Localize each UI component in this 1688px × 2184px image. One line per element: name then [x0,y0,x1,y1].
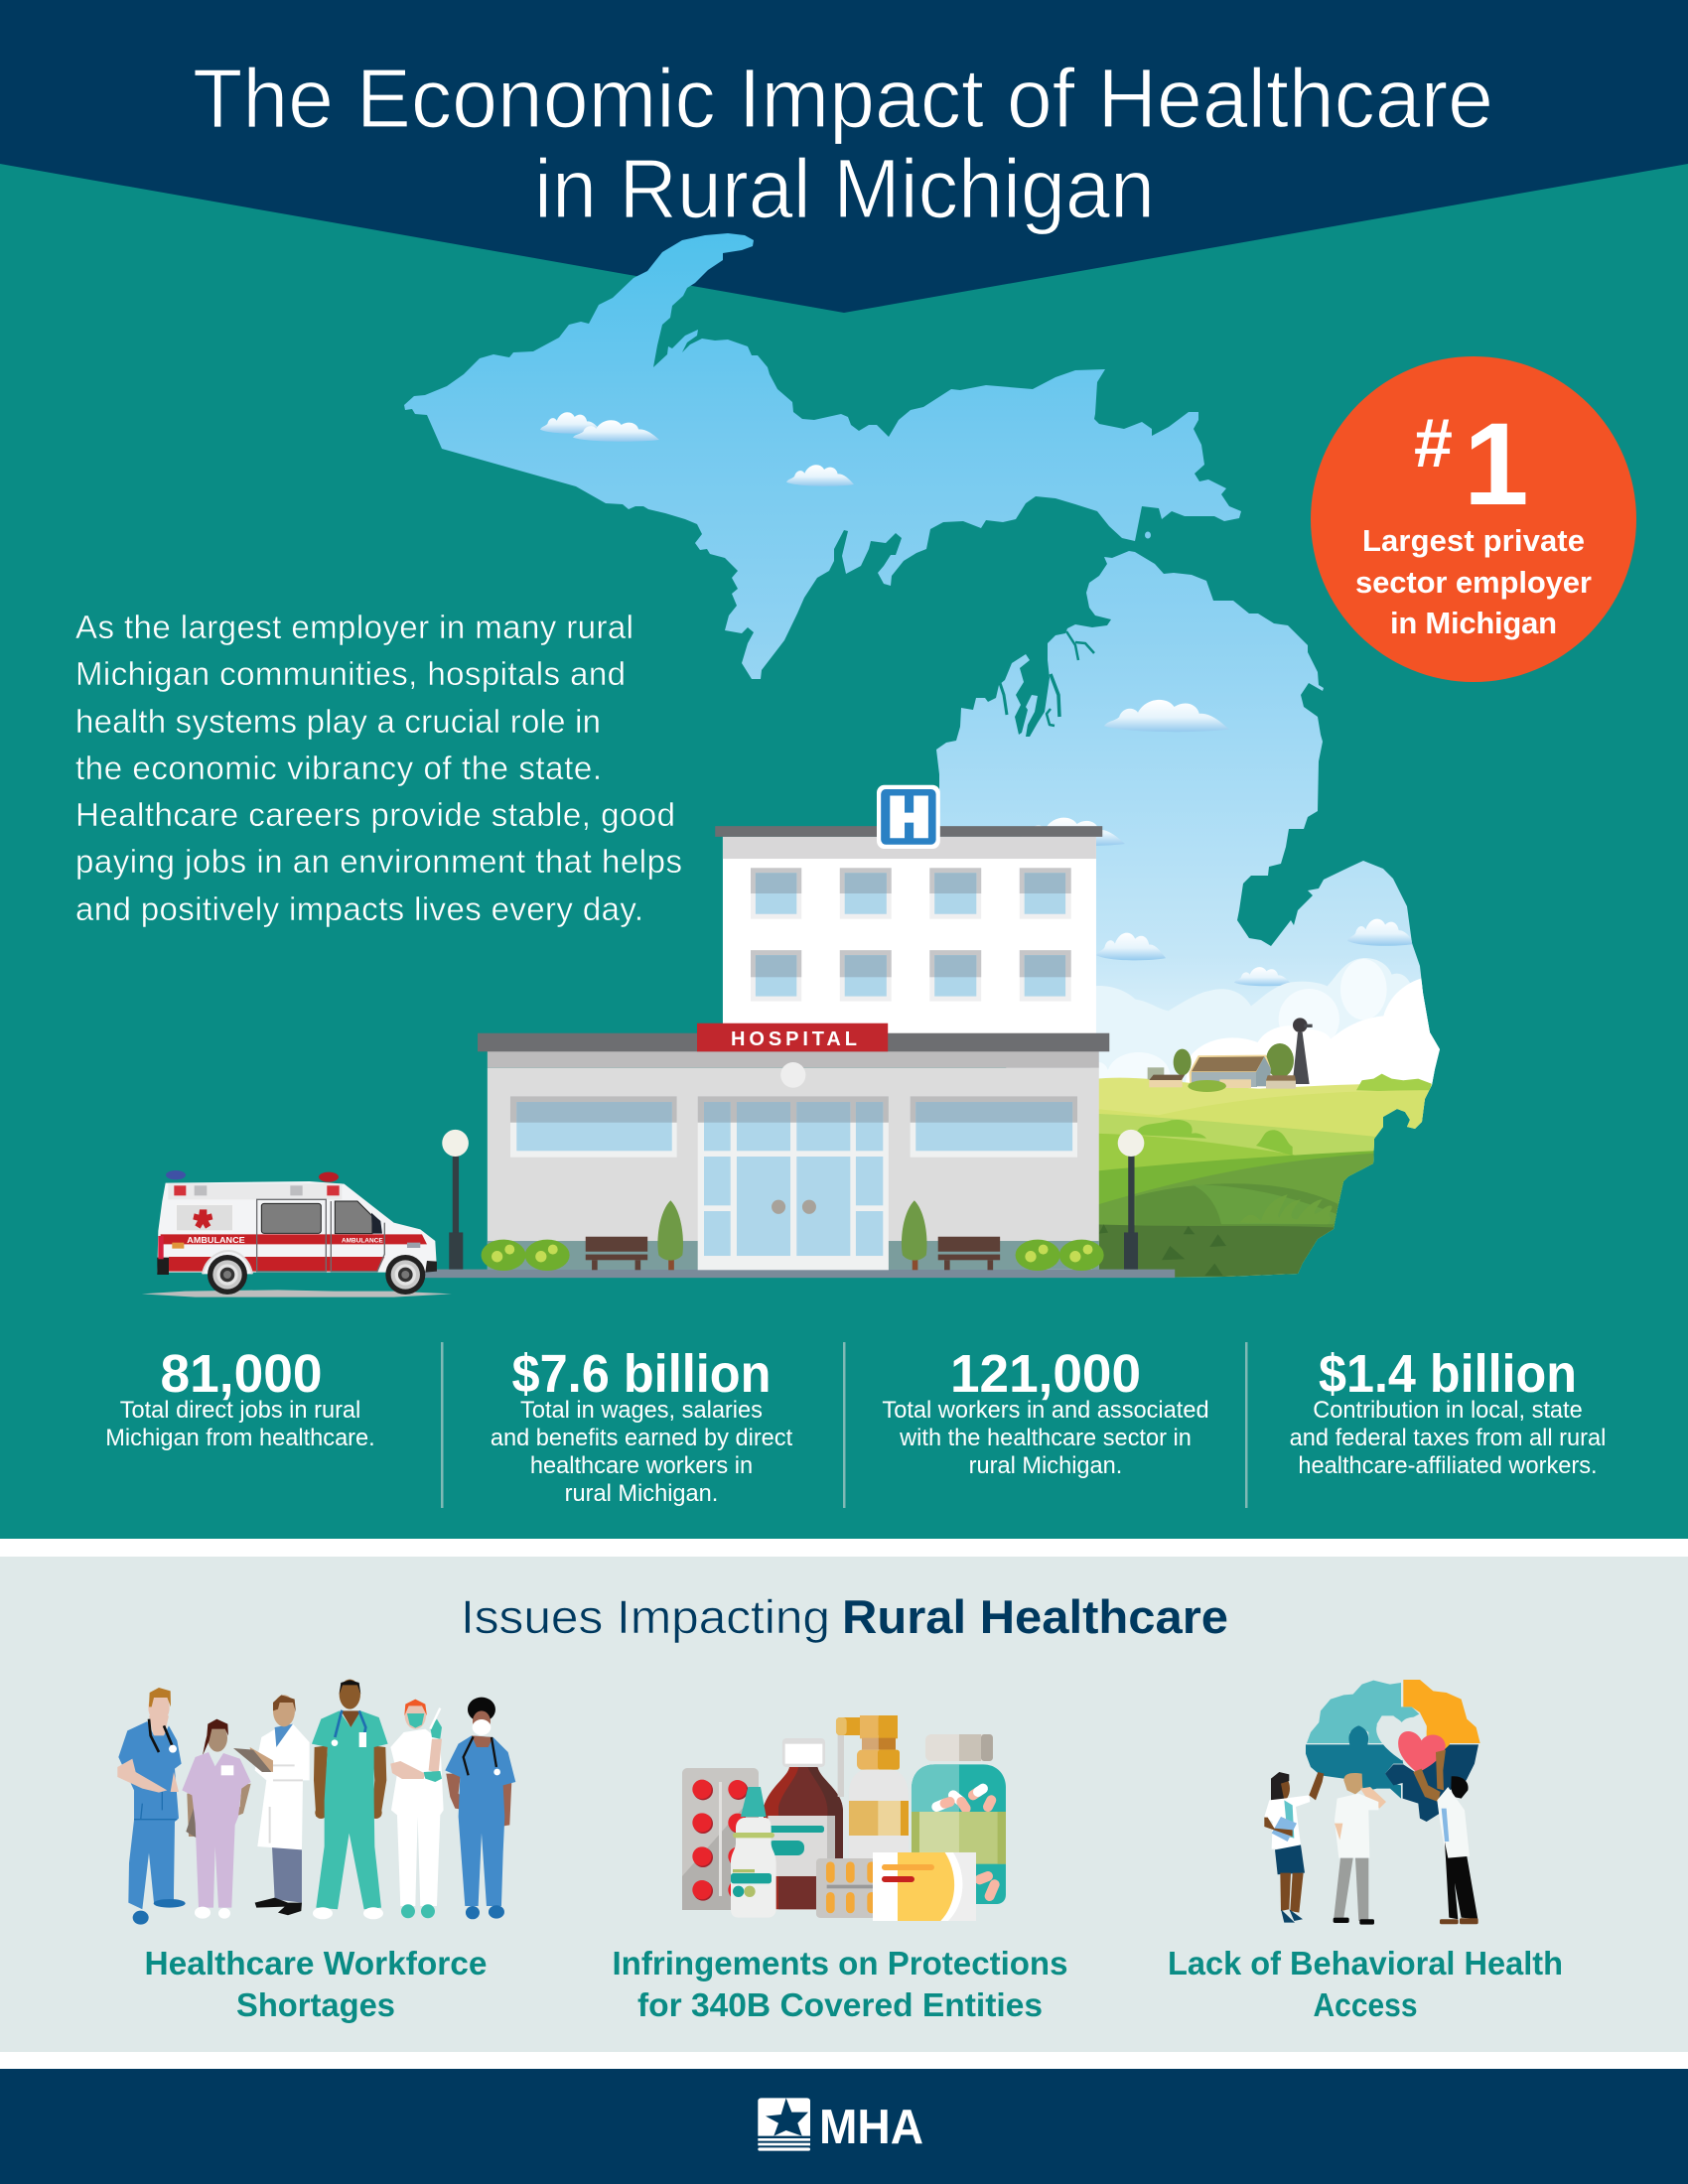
stat: total workers: with the healthcare sector in [899,1426,1192,1451]
orange spray bottle [836,1715,909,1859]
hospital upper building [715,826,1102,1035]
issue label: behavioral health: Lack of Behavioral Health [1168,1945,1563,1981]
stat: taxes: and federal taxes from all rural [1290,1426,1606,1451]
benches [586,1237,1000,1270]
barn [1190,1055,1271,1086]
stat: taxes [1290,1344,1606,1479]
callout: number one employer: sector employer [1355,565,1592,600]
small island [1145,532,1151,538]
header banner [0,0,1688,313]
icon: ambulance [142,1170,452,1297]
sky clouds [1016,700,1415,986]
distant bushes [1356,1074,1432,1093]
worker 3 [233,1695,310,1915]
lower peninsula sky [923,536,1460,1291]
entrance doors [698,1096,889,1270]
intro paragraph: paying jobs in an environment that helps [75,843,682,880]
white heart [1376,1716,1427,1760]
stat: direct jobs [105,1344,375,1451]
stat: wages: rural Michigan. [565,1481,718,1507]
tree left [1174,1049,1192,1075]
doctor centre [1334,1773,1386,1925]
stat: wages: and benefits earned by direct [491,1426,793,1451]
intro paragraph: and positively impacts lives every day. [75,890,643,927]
stat: wages [491,1344,793,1507]
red stripes [161,1234,427,1244]
mid clouds [1099,959,1386,1078]
tree right [1266,1043,1294,1078]
page background: teal panel [0,0,1688,1539]
bushes [482,1240,1104,1271]
callout: number one employer: Largest private [1362,523,1585,558]
brain puzzle bottom right [1385,1744,1478,1822]
stat: total workers [882,1344,1209,1479]
Michigan map [404,233,1460,1291]
brain puzzle top right [1403,1680,1480,1761]
title: The Economic Impact of Healthcare [193,52,1493,145]
hospital sign background [697,1024,888,1051]
intro paragraph [75,609,682,927]
capsule blister [816,1858,889,1918]
worker 1 [117,1688,186,1925]
doctor left [1264,1772,1324,1923]
stat: direct jobs: 81,000 [161,1344,322,1404]
farm outbuildings [1149,1079,1183,1087]
issue label: workforce: Shortages [236,1986,395,2023]
medicine box [873,1852,976,1921]
issue label: 340B: for 340B Covered Entities [637,1986,1043,2023]
intro paragraph: As the largest employer in many rural [75,609,633,645]
stat: taxes: Contribution in local, state [1313,1398,1583,1424]
issue label: behavioral health [1168,1945,1563,2023]
stat: taxes: $1.4 billion [1319,1344,1577,1404]
icon: hospital H sign [877,785,940,849]
stat: wages: $7.6 billion [512,1344,771,1404]
callout: number one employer [1311,356,1636,682]
inland lake channels [1000,631,1094,726]
body [157,1181,437,1273]
footer band [0,2069,1688,2184]
ground strip [419,1270,1175,1278]
panel: issues [0,1557,1688,2052]
silos [1148,1067,1164,1079]
countryside scene [1089,958,1443,1288]
brain puzzle bottom left [1306,1725,1403,1799]
pill jar [912,1734,1006,1904]
door lines [257,1199,384,1272]
side windows [510,1096,1077,1158]
intro paragraph: Michigan communities, hospitals and [75,655,626,692]
issues heading: Issues Impacting [461,1590,830,1643]
stat: direct jobs: Total direct jobs in rural [120,1398,360,1424]
red heart [1398,1731,1446,1773]
medical cross panel [176,1204,233,1231]
issue label: 340B [612,1945,1068,2023]
ambulance wording [187,1235,383,1245]
icon: healthcare workers [117,1680,515,1925]
trees [657,1200,927,1270]
logo mark [758,2098,810,2151]
stat: wages: Total in wages, salaries [520,1398,763,1424]
street lamps [442,1130,1144,1270]
worker 2 [182,1719,251,1919]
upper peninsula clouds [540,412,854,486]
worker 6 [445,1698,515,1919]
ambulance wording: AMBULANCE [187,1235,245,1245]
stat: taxes: healthcare-affiliated workers. [1298,1453,1598,1479]
issue label: workforce [145,1945,487,2023]
worker 5 [390,1700,444,1918]
hospital lower building [478,1033,1109,1270]
ambulance wording: AMBULANCE [342,1237,383,1244]
issues heading: Rural Healthcare [842,1590,1228,1643]
intro paragraph: the economic vibrancy of the state. [75,750,602,786]
worker 4 [312,1680,388,1919]
far clouds [1092,958,1437,1089]
stat: total workers: Total workers in and associated [882,1398,1209,1424]
hills [1092,1078,1437,1288]
hospital scene [419,785,1175,1278]
windows [261,1203,321,1233]
wheels [203,1251,425,1295]
icon: medication bottles [682,1715,1006,1921]
icon: behavioral health brain puzzle [1264,1680,1480,1925]
intro paragraph: Healthcare careers provide stable, good [75,796,675,833]
stat: total workers: 121,000 [950,1344,1141,1404]
title [193,52,1493,235]
upper peninsula [404,233,1241,679]
nasal spray bottle [731,1787,776,1918]
intro paragraph: health systems play a crucial role in [75,703,601,740]
stat: wages: healthcare workers in [530,1453,753,1479]
title: in Rural Michigan [534,142,1155,235]
logo: MHA [758,2098,923,2154]
road shadow [142,1290,452,1297]
callout: number one employer: 1 [1464,399,1529,530]
stat: direct jobs: Michigan from healthcare. [105,1426,375,1451]
brown syrup bottle [764,1738,843,1909]
grass tufts [1283,1195,1333,1211]
pill blister [682,1768,759,1910]
issue label: 340B: Infringements on Protections [612,1945,1068,1981]
callout: number one employer: # [1414,404,1453,481]
issue label: behavioral health: Access [1313,1986,1418,2023]
farm [1148,1018,1313,1092]
stat: total workers: rural Michigan. [969,1453,1122,1479]
doctor right [1413,1750,1478,1924]
logo wordmark: MHA [819,2101,923,2154]
roof lights [166,1170,186,1179]
upper windows [751,868,1071,1002]
shrub [1188,1080,1226,1092]
issue label: workforce: Healthcare Workforce [145,1945,487,1981]
near white clouds [1185,978,1443,1090]
issues heading [461,1590,1228,1643]
windmill [1293,1018,1313,1084]
callout: number one employer: in Michigan [1390,606,1557,640]
brain puzzle top left [1307,1681,1419,1743]
hospital sign label: HOSPITAL [731,1028,857,1050]
